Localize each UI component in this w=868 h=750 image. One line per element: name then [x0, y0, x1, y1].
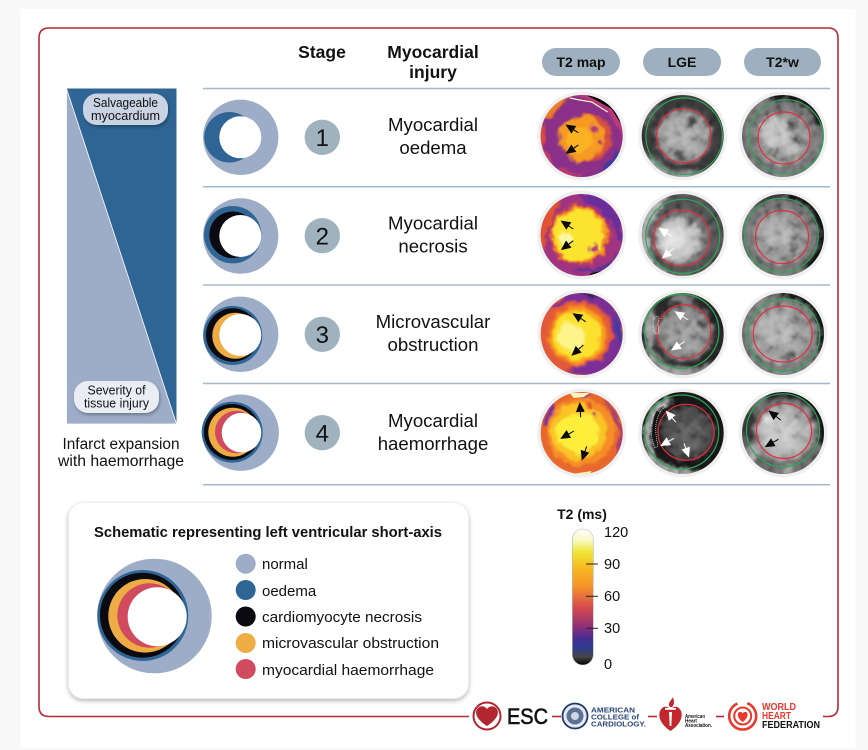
logo: ESC [474, 702, 548, 730]
legend item: normal: normal [262, 556, 308, 573]
panel: schematic legend [68, 502, 468, 698]
stage number 2: 2 [316, 223, 329, 250]
T2*w stage 2 [738, 190, 828, 280]
T2*w stage 1 [738, 92, 828, 180]
schematic stage 2 [203, 198, 278, 274]
logo: ESC: ESC [507, 704, 548, 729]
injury label: myocardial oedema: Myocardial [388, 114, 478, 135]
stage number 2 [305, 218, 340, 253]
schematic stage 1 [203, 100, 278, 175]
legend item: oedema: oedema [262, 583, 317, 600]
T2 map stage 4 [537, 388, 626, 478]
logo: World Heart Federation [729, 702, 820, 731]
schematic stage 3 [203, 297, 278, 372]
T2 colour scale [557, 506, 628, 673]
column pill: T2*w [744, 48, 821, 76]
logo: American Heart Association: Heart [685, 718, 697, 724]
logo: American College of Cardiology: COLLEGE of [591, 712, 640, 722]
column pill: LGE [643, 48, 721, 76]
large short-axis schematic [97, 559, 212, 673]
injury label: myocardial haemorrhage: Myocardial [388, 410, 478, 431]
stage number 1 [305, 120, 340, 155]
stage number 4: 4 [316, 420, 329, 447]
label: severity of tissue injury: Severity of [88, 382, 146, 398]
injury label: microvascular obstruction: obstruction [388, 334, 478, 355]
T2*w stage 4 [738, 388, 828, 478]
legend item: microvascular obstruction: microvascular obstruction [262, 635, 439, 652]
legend item: cardiomyocyte necrosis: cardiomyocyte necrosis [262, 609, 422, 626]
caption: infarct expansion with haemorrhage: Infarct expansion [62, 436, 180, 453]
logo: American College of Cardiology: CARDIOLOGY. [591, 720, 646, 728]
injury label: myocardial oedema: oedema [399, 137, 467, 158]
injury label: myocardial necrosis: necrosis [398, 236, 468, 256]
logo: World Heart Federation: WORLD [762, 702, 796, 713]
T2*w stage 3 [738, 290, 828, 378]
scale labels [604, 525, 628, 673]
colour bar [572, 529, 593, 665]
stage number 3: 3 [316, 322, 329, 349]
heading: myocardial injury: injury [409, 62, 457, 82]
legend item: normal [236, 554, 308, 574]
LGE stage 3 [638, 290, 727, 378]
logo: World Heart Federation: HEART [762, 711, 791, 722]
scale labels: 0 [604, 657, 612, 673]
logo: American College of Cardiology [562, 704, 646, 728]
LGE stage 1 [638, 92, 727, 182]
injury label: myocardial haemorrhage: haemorrhage [378, 433, 488, 454]
caption: infarct expansion with haemorrhage: with haemorrhage [57, 453, 184, 470]
logo: American College of Cardiology: AMERICAN [591, 706, 635, 714]
T2 map stage 3 [537, 288, 626, 378]
legend item: oedema [236, 580, 317, 600]
heading: stage: Stage [298, 42, 346, 62]
column pill: LGE: LGE [668, 54, 696, 70]
injury label: myocardial necrosis: Myocardial [388, 212, 478, 234]
logo: American Heart Association: American [685, 714, 705, 720]
stage number 1: 1 [316, 125, 329, 152]
stage number 4 [305, 415, 340, 450]
scale labels: 90 [604, 557, 620, 573]
label: salvageable myocardium [83, 94, 168, 125]
scale labels: 30 [604, 621, 620, 637]
logo: World Heart Federation: FEDERATION [762, 720, 820, 731]
logo: American Heart Association [659, 697, 713, 731]
panel: infarct expansion wedge [66, 88, 176, 424]
column pill: T2 map [542, 48, 620, 76]
colour scale title: T2 (ms) [557, 506, 607, 522]
label: salvageable myocardium: Salvageable [93, 95, 158, 110]
label: severity of tissue injury: tissue injury [84, 396, 149, 410]
legend item: myocardial haemorrhage: myocardial haemorrhage [262, 662, 434, 679]
T2 map stage 1 [536, 92, 626, 180]
schematic stage 4 [202, 394, 279, 471]
legend title: Schematic representing left ventricular short-axis [94, 525, 442, 541]
LGE stage 2 [637, 190, 727, 281]
injury label: microvascular obstruction: Microvascular [376, 311, 490, 332]
row dividers [203, 88, 830, 485]
column pill: T2*w: T2*w [766, 54, 799, 70]
label: salvageable myocardium: myocardium [91, 108, 160, 123]
LGE stage 4 [638, 388, 727, 478]
scale labels: 60 [604, 589, 620, 605]
T2 map stage 2 [537, 190, 626, 280]
heading: myocardial injury: Myocardial [387, 42, 479, 62]
logo: American Heart Association: Association. [685, 723, 713, 729]
column pill: T2 map: T2 map [556, 54, 606, 70]
label: severity of tissue injury [74, 381, 159, 413]
stage number 3 [305, 317, 340, 352]
scale labels: 120 [604, 525, 628, 541]
